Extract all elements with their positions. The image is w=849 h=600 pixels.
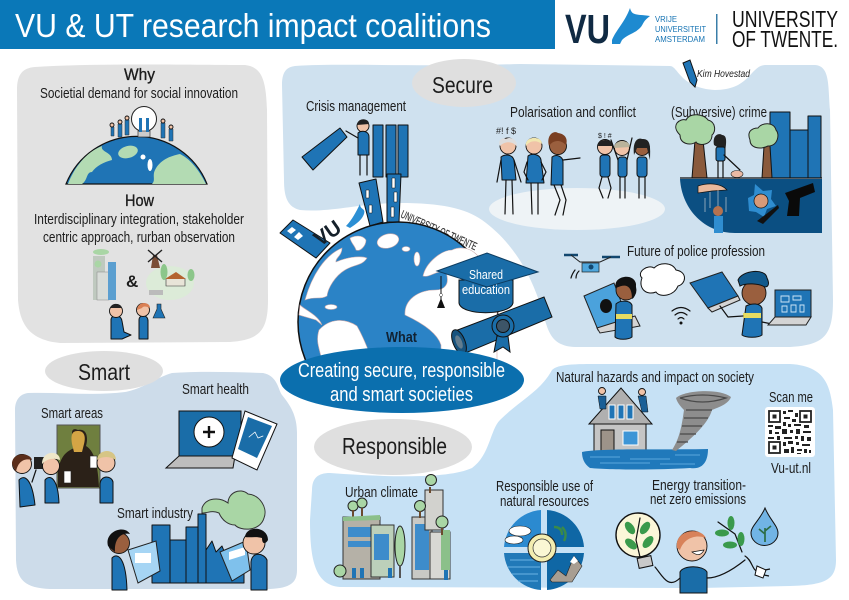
illustration: police officer with laptops bbox=[690, 271, 811, 337]
illustration: flooded house bbox=[582, 388, 708, 470]
logo text: University of Twente on globe: UNIVERSITY OF TWENTE bbox=[399, 209, 479, 253]
QR code bbox=[765, 407, 815, 457]
panel: why and how bbox=[17, 64, 268, 343]
label: crisis management: Crisis management bbox=[306, 98, 407, 115]
text: societal demand: Societial demand for social innovation bbox=[40, 86, 238, 102]
label: energy transition bbox=[650, 477, 746, 508]
illustration: factory skyline bbox=[152, 514, 244, 583]
illustration: people with laptops bbox=[107, 529, 268, 590]
panel: responsible bbox=[310, 364, 836, 593]
label: urban climate: Urban climate bbox=[345, 484, 418, 501]
icon: electric plug bbox=[745, 556, 770, 578]
logo: Vrije Universiteit Amsterdam: UNIVERSITEIT bbox=[655, 25, 706, 34]
icon: rural windmill and farm bbox=[146, 250, 194, 300]
label: natural hazards: Natural hazards and impact on society bbox=[556, 369, 754, 386]
callout: what ellipse: and smart societies bbox=[330, 384, 473, 406]
illustration: green urban buildings bbox=[334, 474, 450, 580]
illustration: smiling person bbox=[655, 531, 745, 593]
label: smart areas: Smart areas bbox=[41, 405, 103, 422]
icon: green city building bbox=[93, 249, 116, 300]
label: subversive crime: (Subversive) crime bbox=[671, 104, 767, 121]
icon: water drop with sprout bbox=[751, 508, 778, 545]
heading pill: secure: Secure bbox=[432, 72, 493, 98]
label: what: What bbox=[386, 329, 417, 346]
continents bbox=[298, 233, 498, 360]
icon: graduation cap bbox=[437, 253, 538, 313]
icon: resources circle with sun bbox=[504, 510, 584, 590]
label: shared education: education bbox=[462, 283, 510, 297]
label: shared education bbox=[462, 268, 510, 297]
icon: handshake people and flask bbox=[110, 303, 165, 339]
logo text: VU on globe: VU bbox=[310, 216, 346, 251]
label: scan me: Scan me bbox=[769, 389, 813, 406]
text: ampersand: & bbox=[126, 272, 138, 291]
label: polarisation and conflict: Polarisation and conflict bbox=[510, 104, 637, 121]
label: smart health: Smart health bbox=[182, 381, 249, 398]
logo: University of Twente bbox=[716, 6, 838, 52]
illustration: plant branch bbox=[715, 516, 744, 552]
label: energy transition: net zero emissions bbox=[650, 491, 746, 508]
label: shared education: Shared bbox=[469, 268, 503, 282]
label: responsible use of natural resources: natural resources bbox=[500, 493, 589, 510]
heading pill: secure bbox=[412, 59, 516, 107]
label: smart industry: Smart industry bbox=[117, 505, 193, 522]
illustration: polarised groups bbox=[489, 126, 665, 230]
callout: what ellipse: Creating secure, responsible bbox=[298, 360, 505, 382]
callout: what ellipse bbox=[280, 347, 524, 413]
globe sphere bbox=[297, 221, 498, 360]
illustration: lightbulb with plant bbox=[616, 513, 660, 568]
label: responsible use of natural resources bbox=[496, 478, 594, 510]
header bar bbox=[0, 0, 555, 49]
panel: smart bbox=[12, 351, 297, 590]
illustrator signature: Kim Hovestad bbox=[697, 69, 750, 80]
title: VU & UT research impact coalitions bbox=[15, 7, 491, 44]
heading pill: responsible bbox=[314, 419, 472, 475]
illustration: city park and underworld bbox=[676, 112, 822, 233]
illustration: tornado bbox=[672, 391, 731, 451]
heading: how: How bbox=[125, 191, 155, 210]
icon: feather on globe bbox=[346, 204, 364, 228]
panel background bbox=[310, 364, 836, 588]
icon: buildings on globe bbox=[280, 174, 401, 258]
label: responsible use of natural resources: Responsible use of bbox=[496, 478, 594, 495]
icon: dominoes and person bbox=[302, 119, 408, 177]
text: how description: Interdisciplinary integration, stakeholder bbox=[34, 212, 244, 228]
text: how description: centric approach, rurban observation bbox=[43, 230, 235, 246]
label: vu-ut.nl: Vu-ut.nl bbox=[771, 460, 811, 477]
illustration: polarised groups: $ ! # bbox=[598, 133, 612, 140]
illustration: person with laptop showing suspect bbox=[584, 277, 640, 339]
panel: secure bbox=[282, 59, 833, 347]
logo: Vrije Universiteit Amsterdam: AMSTERDAM bbox=[655, 35, 705, 44]
text: how description bbox=[34, 212, 244, 246]
illustrator signature bbox=[683, 60, 750, 87]
icon: wifi bbox=[672, 308, 690, 324]
logo: Vrije Universiteit Amsterdam: VRIJE bbox=[655, 15, 677, 24]
panel background bbox=[15, 372, 297, 589]
icon: diploma bbox=[449, 297, 552, 356]
heading pill: smart bbox=[45, 351, 163, 391]
heading: why: Why bbox=[124, 65, 155, 84]
illustration: thought cloud bbox=[640, 264, 684, 295]
illustration: smoke cloud bbox=[202, 491, 265, 529]
illustration: polarised groups: #! f $ bbox=[496, 126, 516, 136]
illustration: drone bbox=[564, 255, 620, 278]
illustration: Mona Lisa with visitors bbox=[12, 425, 116, 507]
logo: Vrije Universiteit Amsterdam: VU bbox=[565, 6, 610, 52]
icon: earth dome with people and lightbulb bbox=[66, 106, 207, 184]
logo: Vrije Universiteit Amsterdam bbox=[565, 6, 706, 52]
heading pill: responsible: Responsible bbox=[342, 433, 447, 459]
heading pill: smart: Smart bbox=[78, 359, 131, 385]
central globe bbox=[280, 174, 552, 422]
label: future of police profession: Future of police profession bbox=[627, 243, 765, 260]
label: energy transition: Energy transition- bbox=[652, 477, 746, 494]
illustration: laptop and phone health bbox=[166, 411, 277, 470]
